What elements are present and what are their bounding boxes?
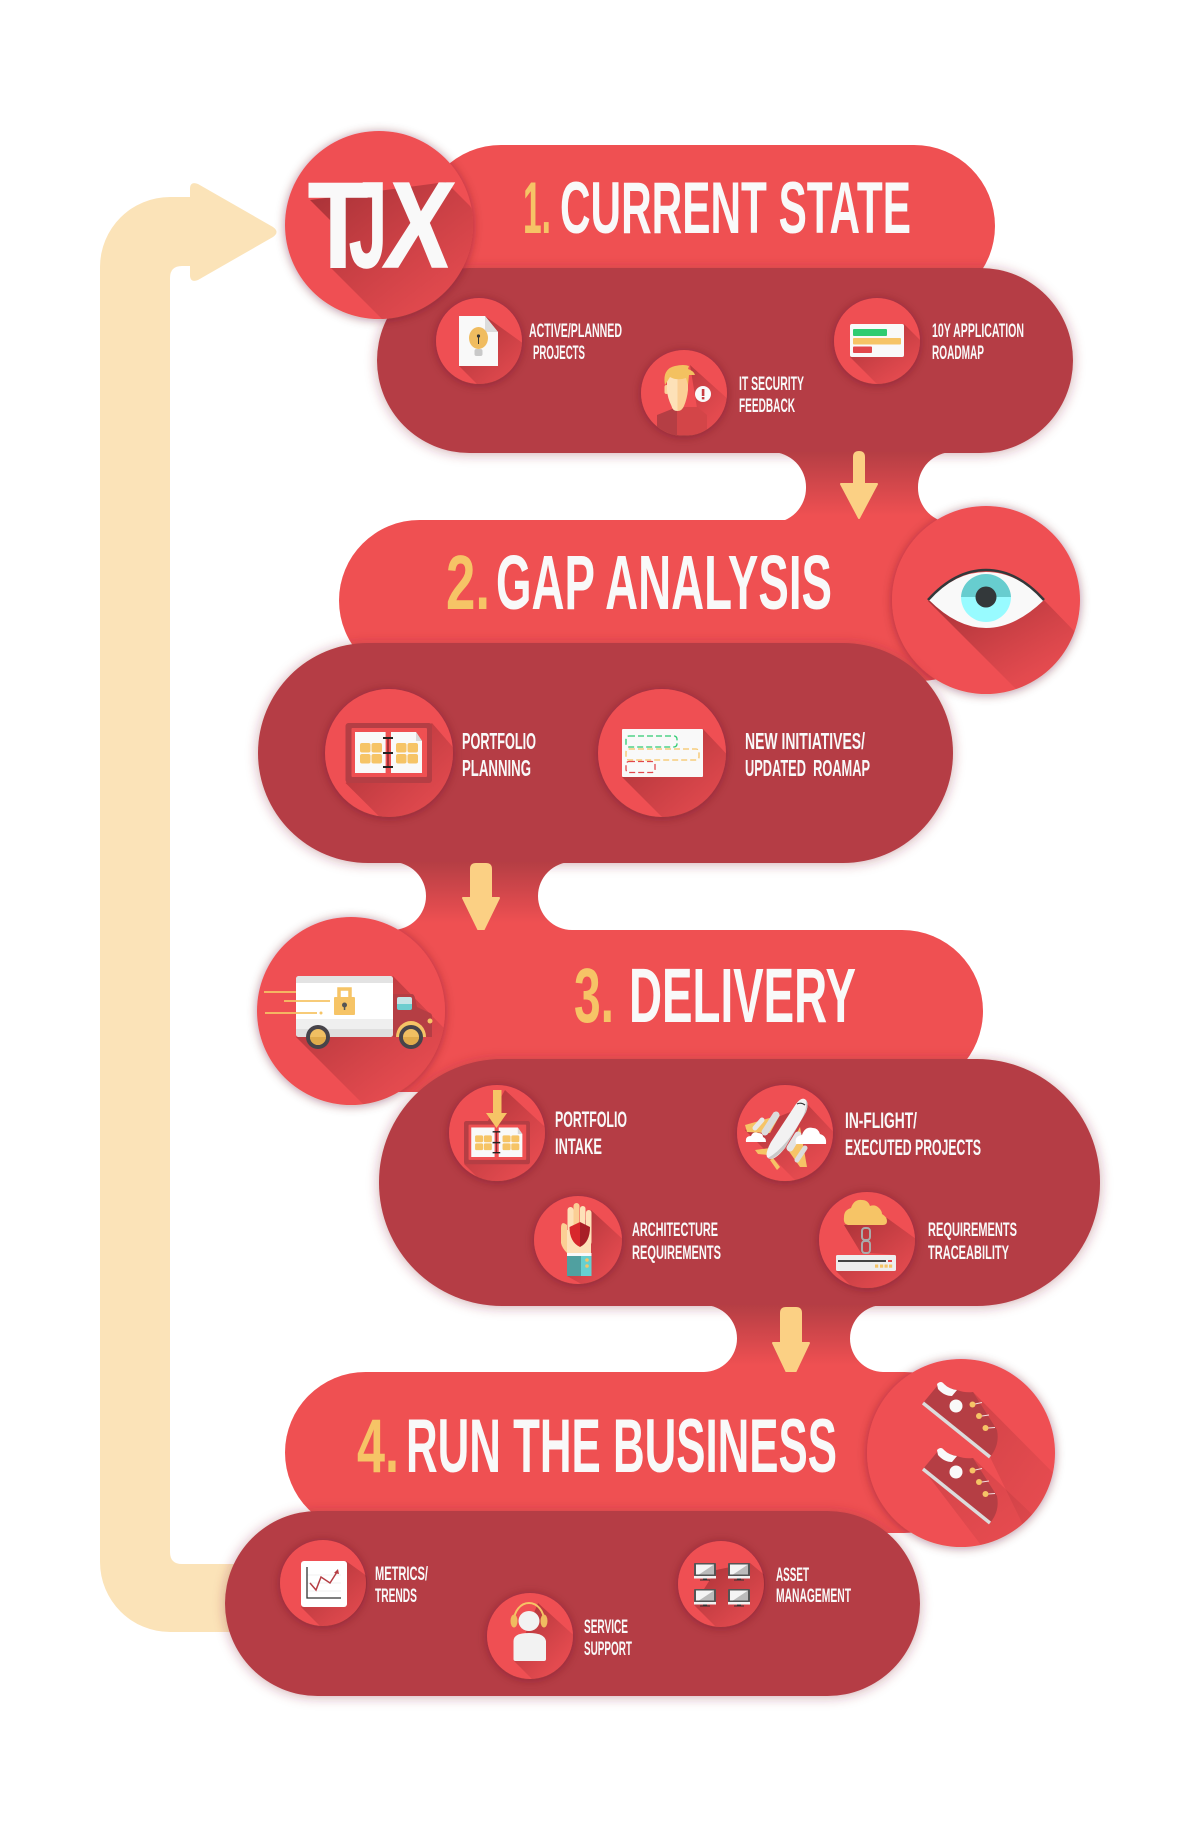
label: service support: SERVICE [584,1617,628,1638]
header pill 2 [339,520,1000,681]
icon: asset management monitors [674,1538,768,1632]
arrow 2 [463,864,499,935]
label: active planned projects: ACTIVE/PLANNED [529,321,622,342]
label: portfolio intake: INTAKE [555,1134,602,1159]
label: asset management: ASSET [776,1565,809,1586]
label: portfolio planning: PLANNING [462,755,531,781]
icon: delivery truck [250,911,450,1113]
icon: it security person [638,348,730,440]
arrow 1 [841,452,877,518]
label: new initiatives updated roadmap: NEW INITIATIVES/ [745,728,865,754]
heading 2: GAP ANALYSIS [496,540,832,626]
label: asset management [776,1565,851,1607]
header pill 4 [285,1372,985,1533]
logo letters: T [308,157,368,293]
details pill 3 [379,1059,1100,1306]
logo letters: J [349,157,387,293]
label: in-flight executed projects: IN-FLIGHT/ [845,1108,917,1133]
heading 1 [523,168,911,249]
details pill 2 [258,643,953,863]
label: in-flight executed projects [845,1108,981,1160]
label: metrics trends [375,1564,428,1607]
panel: step 4 run the business header [285,1305,1090,1570]
panel: step 4 details [225,1511,920,1696]
label: portfolio planning: PORTFOLIO [462,728,536,754]
details pill 4 [225,1511,920,1696]
feedback loop arrow [100,183,276,1632]
panel: step 3 details [379,1059,1100,1306]
heading 3 [574,953,856,1039]
label: metrics trends: TRENDS [375,1586,417,1607]
connector 2 to 3 [392,862,572,930]
heading 1: 1. [523,168,551,249]
label: new initiatives updated roadmap [745,728,870,781]
label: asset management: MANAGEMENT [776,1586,851,1607]
label: active planned projects: PROJECTS [533,343,585,364]
connector 1 to 2 [771,452,953,523]
label: new initiatives updated roadmap: UPDATED ROAMAP [745,755,870,781]
label: requirements traceability: REQUIREMENTS [928,1220,1017,1241]
heading 4 [357,1404,837,1489]
panel: step 1 current state [377,145,1073,453]
icon: shoes [862,1353,1062,1555]
icon: new initiatives card [594,686,730,822]
panel: step 2 details [258,643,953,863]
logo letters: X [379,156,460,293]
label: portfolio planning [462,728,536,781]
label: 10y application roadmap: ROADMAP [932,343,984,364]
label: it security feedback: FEEDBACK [739,396,795,417]
label: architecture requirements: REQUIREMENTS [632,1243,721,1264]
connector 3 to 4 [704,1305,883,1372]
logo letters [308,156,460,293]
icon: application roadmap card [830,296,924,388]
label: active planned projects [529,321,622,364]
panel: step 3 delivery header [257,862,983,1121]
heading 4: 4. [357,1404,399,1489]
label: metrics trends: METRICS/ [375,1564,428,1585]
icon: portfolio planning binder [322,686,456,822]
label: service support: SUPPORT [584,1639,632,1660]
icon: service support agent [484,1590,576,1684]
heading 3: DELIVERY [629,953,856,1039]
icon: metrics chart card [276,1538,370,1630]
header pill 1 [420,145,995,307]
icon: airplane with clouds [734,1082,836,1186]
label: service support [584,1617,632,1660]
icon: portfolio intake [446,1082,548,1186]
header pill 3 [310,930,983,1092]
label: requirements traceability [928,1220,1017,1264]
details pill 1 [377,268,1073,453]
heading 3: 3. [574,953,614,1039]
heading 4: RUN THE BUSINESS [406,1404,837,1489]
heading 1: CURRENT STATE [560,168,911,249]
label: in-flight executed projects: EXECUTED PROJECTS [845,1135,981,1160]
icon: hand with shield [530,1194,626,1288]
icon: cloud chain server [816,1190,918,1292]
icon: TJX logo badge [278,125,478,327]
icon: eye [892,506,1110,703]
label: 10y application roadmap: 10Y APPLICATION [932,321,1024,342]
label: architecture requirements [632,1220,721,1264]
label: it security feedback [739,374,804,417]
label: 10y application roadmap [932,321,1024,364]
label: requirements traceability: TRACEABILITY [928,1243,1009,1264]
heading 2: 2. [446,540,490,626]
heading 2 [446,540,832,626]
label: architecture requirements: ARCHITECTURE [632,1220,718,1241]
icon: active planned projects document [432,296,526,388]
label: it security feedback: IT SECURITY [739,374,804,395]
arrow 3 [773,1308,809,1381]
panel: step 2 gap analysis header [339,452,1110,703]
label: portfolio intake [555,1107,627,1159]
label: portfolio intake: PORTFOLIO [555,1107,627,1132]
